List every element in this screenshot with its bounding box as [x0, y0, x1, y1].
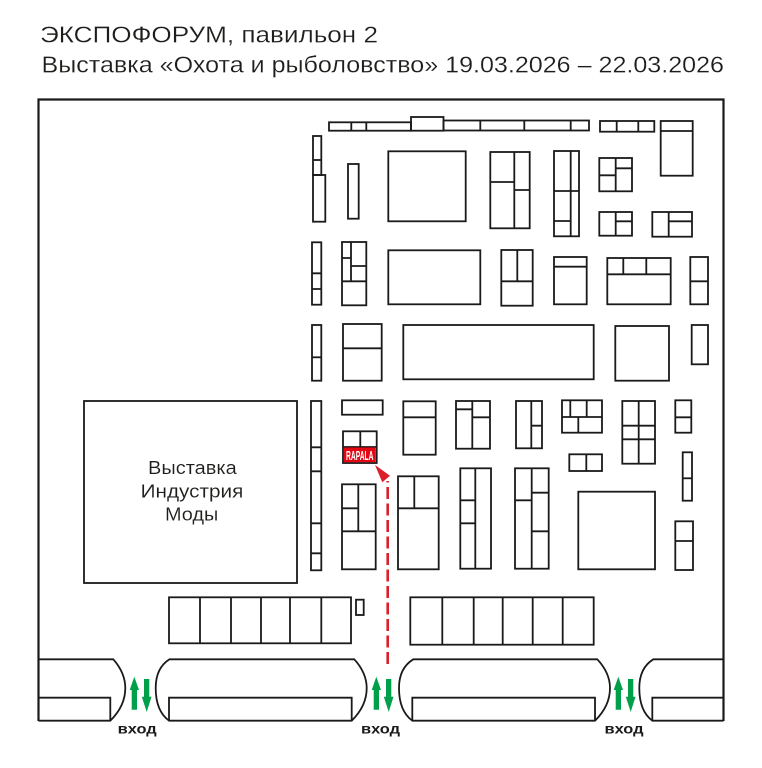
exhibition label: Индустрия	[141, 481, 243, 501]
stand split row 1	[490, 152, 530, 228]
stand row 5 d	[515, 468, 549, 569]
stand row 5 a	[342, 484, 376, 569]
stand row 4 f	[675, 400, 691, 433]
red route arrow	[375, 465, 390, 664]
stand row 5 c	[460, 468, 491, 569]
stand row 2 right	[690, 257, 708, 304]
stand row 3 split	[343, 324, 382, 381]
stand row 4 c	[516, 401, 542, 448]
stand column left row 1	[313, 136, 325, 222]
entrance arrows 1	[130, 677, 152, 712]
entrance hall 2	[156, 659, 367, 721]
title: ЭКСПОФОРУМ, павильон 2	[40, 21, 378, 47]
bottom row right	[410, 597, 594, 645]
stand column left row 4	[311, 401, 321, 570]
stand row 2 wide	[607, 258, 671, 304]
top stand strip	[329, 117, 589, 131]
exhibition block: fashion industry	[84, 401, 297, 583]
exhibition label: Моды	[165, 505, 218, 525]
Rapala logo: RAPALA	[346, 448, 374, 463]
entrance labels: вход	[361, 720, 400, 736]
entrance hall 1	[38, 659, 125, 721]
Rapala stand	[343, 431, 377, 463]
stand large row 2	[388, 250, 480, 304]
entrance hall 3	[399, 659, 610, 721]
stand row 5 right	[675, 521, 693, 570]
title	[40, 21, 724, 77]
exhibition label	[141, 458, 243, 525]
stand narrow	[348, 164, 359, 219]
title: Выставка «Охота и рыболовство» 19.03.2026 – 22.03.2026	[42, 51, 724, 77]
stand row 3 right	[692, 325, 708, 364]
stand large row 1	[388, 151, 466, 221]
stand small pair	[569, 454, 602, 471]
stand block upper	[599, 158, 632, 191]
stand column left row 2	[312, 242, 321, 305]
stand row 4 d	[562, 400, 602, 433]
stand strip right	[600, 121, 654, 132]
stand split row 2	[342, 242, 366, 305]
stand row 4 b	[456, 401, 490, 449]
entrance labels: вход	[604, 720, 644, 736]
stand row 3 large	[403, 325, 594, 379]
stand row 4 e	[622, 401, 655, 464]
stand narrow right	[683, 452, 692, 501]
stand row 3 square	[615, 326, 669, 381]
stand top right	[661, 121, 693, 176]
stand row 2 header	[554, 257, 587, 304]
stand row 4 a	[403, 401, 436, 455]
stand row 5 b	[398, 476, 439, 569]
stand row 4 flat	[342, 400, 383, 415]
entrance labels: вход	[118, 720, 157, 736]
entrance arrows 2	[372, 677, 394, 712]
entrance labels	[118, 720, 644, 736]
stand row 5 square	[578, 492, 655, 569]
bottom row left	[169, 597, 351, 643]
pavilion outline	[38, 100, 724, 721]
floor plan stands	[38, 117, 724, 721]
entrance hall 4	[639, 659, 724, 721]
stand block lower	[599, 212, 632, 236]
stand row 2 center	[501, 250, 533, 306]
entrance arrows 3	[614, 677, 636, 712]
stand tall row 1	[554, 151, 579, 236]
small column	[356, 600, 364, 615]
stand block right	[652, 212, 692, 237]
exhibition label: Выставка	[148, 458, 238, 478]
stand column left row 3	[312, 325, 321, 381]
